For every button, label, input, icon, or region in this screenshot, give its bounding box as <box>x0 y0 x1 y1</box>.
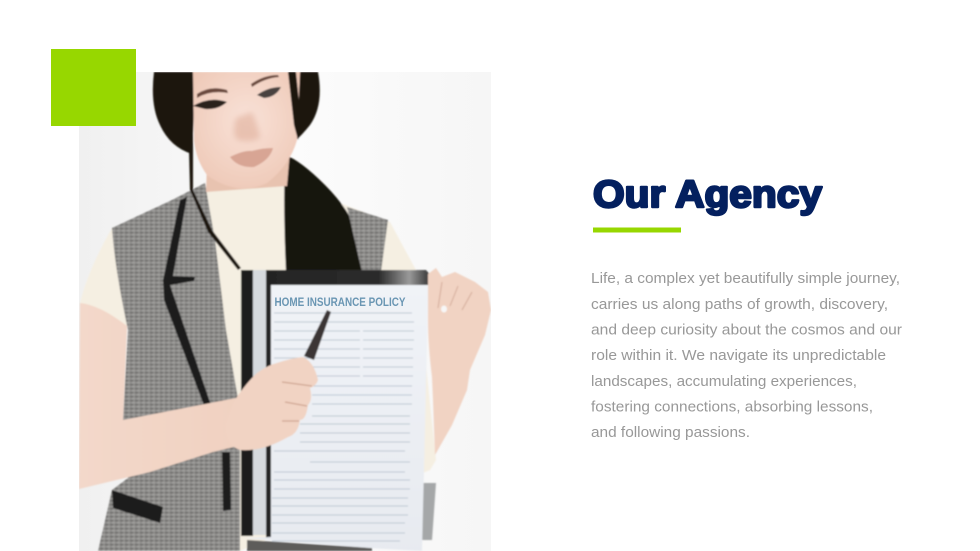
face <box>193 72 300 188</box>
right arm and hand <box>428 268 491 455</box>
finger creases <box>282 382 312 421</box>
body text: role within it. We navigate its unpredictable <box>591 347 886 364</box>
hair strands <box>188 135 242 270</box>
title underline <box>593 228 681 232</box>
body text: and deep curiosity about the cosmos and our <box>591 322 902 338</box>
side stripe <box>222 452 231 511</box>
lips <box>230 148 273 167</box>
vest left panel <box>98 183 240 551</box>
body text: fostering connections, absorbing lessons, <box>591 398 873 416</box>
body text: landscapes, accumulating experiences, <box>591 373 857 390</box>
title: Our Agency <box>593 174 822 216</box>
figure of the woman <box>79 72 491 551</box>
body text: and following passions. <box>591 424 750 441</box>
form heading: HOME INSURANCE POLICY <box>274 297 406 309</box>
photo: woman holding a home insurance policy <box>79 72 491 551</box>
finger creases right <box>438 282 472 310</box>
nose shadow <box>234 112 260 141</box>
body text <box>591 270 902 441</box>
pen <box>304 310 331 360</box>
hair bun <box>153 72 320 154</box>
finger gap <box>441 306 447 312</box>
body text: Life, a complex yet beautifully simple journey, <box>591 270 900 287</box>
form lines <box>272 313 414 541</box>
eyes and brows <box>193 75 281 109</box>
cream top and sleeves <box>80 183 436 551</box>
vest right panel <box>347 207 388 272</box>
vest belt <box>112 490 163 523</box>
vest under clipboard <box>247 540 372 551</box>
left hand <box>225 357 318 450</box>
clipboard back edge <box>420 483 436 540</box>
lapel stripe <box>163 197 211 408</box>
arm <box>79 303 236 490</box>
photo backdrop <box>79 72 491 551</box>
body text: carries us along paths of growth, discovery, <box>591 296 888 313</box>
clipboard spine <box>241 270 271 538</box>
policy paper <box>243 285 428 551</box>
clipboard top band <box>270 269 430 286</box>
ponytail <box>284 155 368 272</box>
neck <box>206 158 291 192</box>
green accent square <box>51 49 136 126</box>
